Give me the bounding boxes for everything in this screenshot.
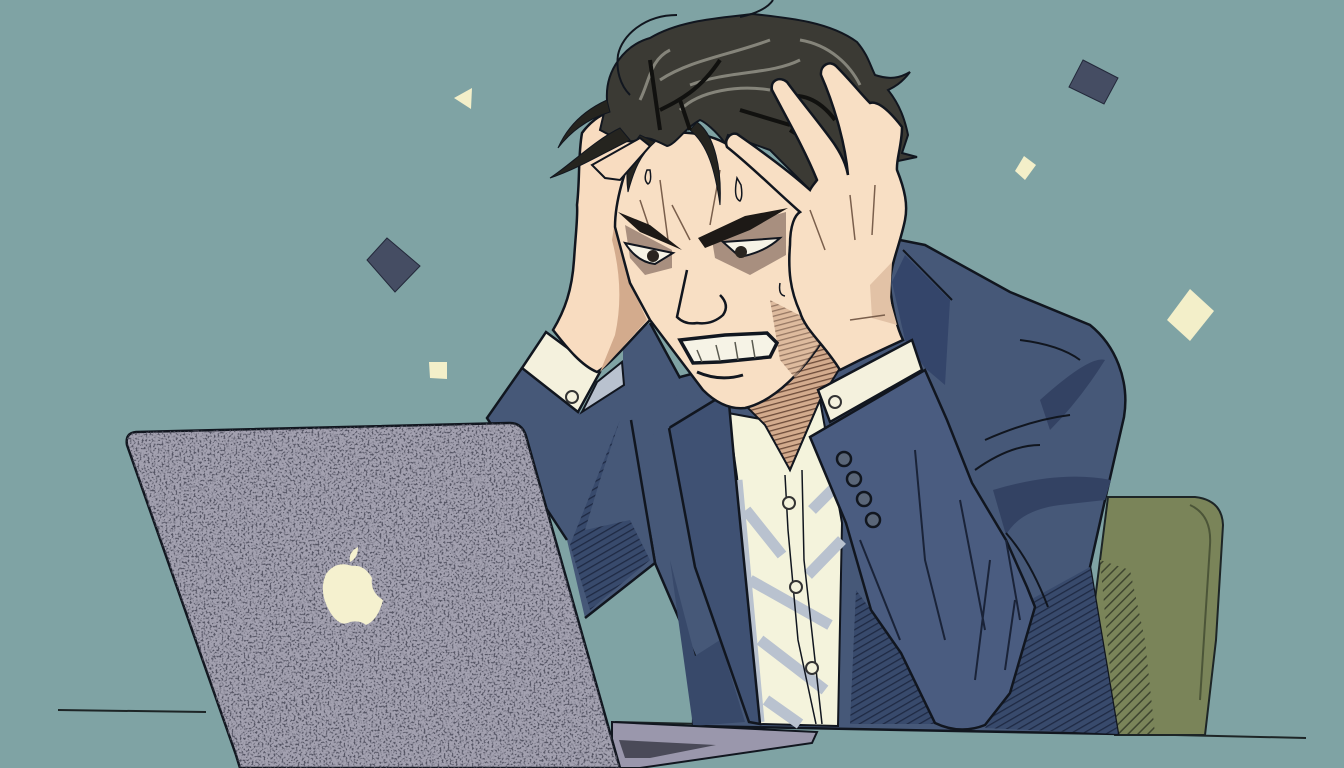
right sleeve — [810, 370, 1035, 730]
right cuff — [818, 340, 922, 422]
right hand details — [810, 185, 897, 325]
nose — [677, 270, 726, 323]
left hand shading — [600, 220, 647, 372]
laptop base and keyboard — [612, 722, 817, 768]
neck — [745, 340, 840, 470]
jacket shading — [670, 250, 1118, 734]
apple logo — [323, 547, 383, 625]
floating confetti shapes — [367, 60, 1214, 379]
eyes — [625, 238, 780, 264]
sleeve folds — [860, 450, 1020, 680]
sweat drops — [645, 170, 785, 296]
left hand — [553, 113, 650, 372]
laptop lid — [127, 423, 620, 768]
left sleeve — [487, 323, 680, 618]
face — [615, 133, 823, 408]
left hand fingers — [592, 138, 650, 180]
man — [127, 0, 1125, 768]
left cuff — [522, 332, 624, 412]
shirt — [728, 400, 842, 726]
desk edge lines — [58, 710, 1306, 738]
right hand — [726, 63, 906, 370]
left sleeve folds — [570, 420, 650, 610]
hair — [550, 0, 917, 205]
mouth — [680, 333, 777, 363]
left lapel — [669, 392, 760, 724]
face shading — [625, 170, 823, 378]
laptop — [127, 423, 817, 768]
sleeve buttons — [837, 452, 880, 527]
chair — [1095, 497, 1223, 735]
eyebrows — [618, 208, 788, 250]
jacket body — [631, 240, 1125, 734]
